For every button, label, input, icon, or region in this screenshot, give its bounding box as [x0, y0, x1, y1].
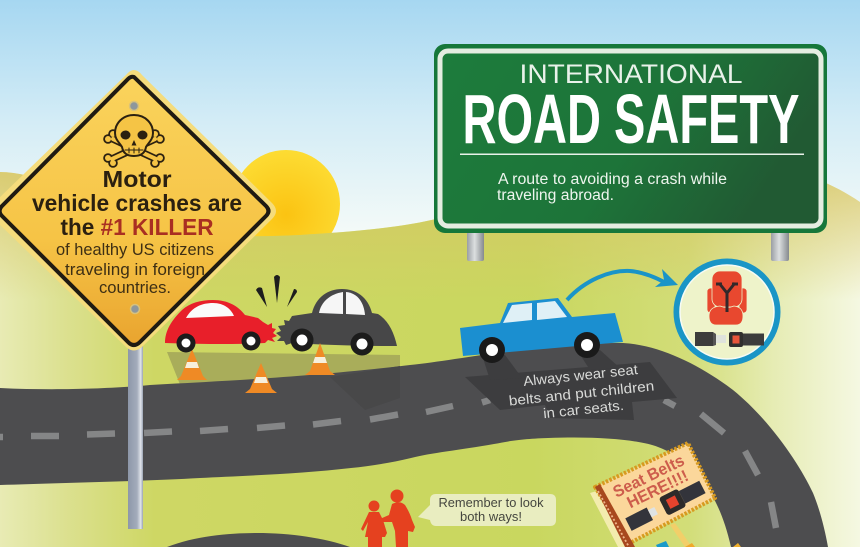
callout: look both ways: [418, 494, 556, 526]
arrow to seat icon: [567, 269, 678, 300]
sign text: [32, 166, 242, 297]
green sign post left: [467, 230, 484, 261]
main road: [0, 343, 828, 547]
billboard text: Seat Belts: [610, 452, 687, 501]
callout: look both ways: both ways!: [460, 510, 522, 524]
road centre dashes: [0, 400, 776, 528]
child seat: [707, 271, 747, 325]
sign text: vehicle crashes are: [32, 190, 242, 216]
pedestrians icon: [361, 490, 415, 547]
cone 3: [305, 343, 335, 375]
icon: car seat and seat belt: [676, 262, 778, 362]
subtitle: [497, 171, 727, 204]
icon: skull and crossbones: [103, 115, 165, 168]
cone 1: [177, 349, 207, 380]
sign text: Motor: [102, 166, 172, 192]
seat belt tip text: belts and put children: [508, 377, 655, 409]
green title sign: [434, 44, 827, 233]
blue car shadow with text plate: [465, 350, 677, 420]
lower road curve: [167, 533, 350, 547]
adult: [380, 490, 415, 547]
blue car: [460, 298, 623, 363]
cone 2: [245, 363, 277, 393]
seat belt tip text: [508, 361, 655, 421]
crash road shadow: [330, 366, 400, 410]
sign text: traveling in foreign: [65, 260, 205, 279]
warning diamond sign: [0, 70, 276, 350]
billboard text: HERE!!!!: [624, 467, 691, 512]
green sign post right: [771, 230, 789, 261]
seat belt tip text: Always wear seat: [522, 361, 639, 389]
sun: [232, 150, 340, 258]
title: INTERNATIONAL: [520, 59, 742, 89]
hills: [0, 165, 860, 547]
billboard belt icon: [624, 478, 707, 534]
subtitle: traveling abroad.: [497, 187, 614, 204]
harness straps: [716, 283, 738, 312]
gray car: [276, 289, 397, 356]
subtitle: A route to avoiding a crash while: [498, 171, 727, 188]
callout: look both ways: Remember to look: [438, 496, 544, 510]
sign text: countries.: [99, 278, 171, 297]
crash shadow: [167, 352, 400, 392]
bottom clipped objects: [656, 523, 741, 547]
warning sign pole: [128, 340, 143, 529]
sky: [0, 0, 860, 240]
bolts: [130, 102, 140, 314]
seat belt: [695, 332, 764, 347]
sign text: of healthy US citizens: [56, 240, 214, 259]
red car: [165, 300, 277, 352]
seat belts billboard: [590, 443, 715, 547]
seat belt tip text: in car seats.: [542, 397, 625, 421]
sign text: the #1 KILLER: [60, 214, 214, 240]
child: [361, 500, 387, 547]
impact marks: [256, 275, 297, 307]
